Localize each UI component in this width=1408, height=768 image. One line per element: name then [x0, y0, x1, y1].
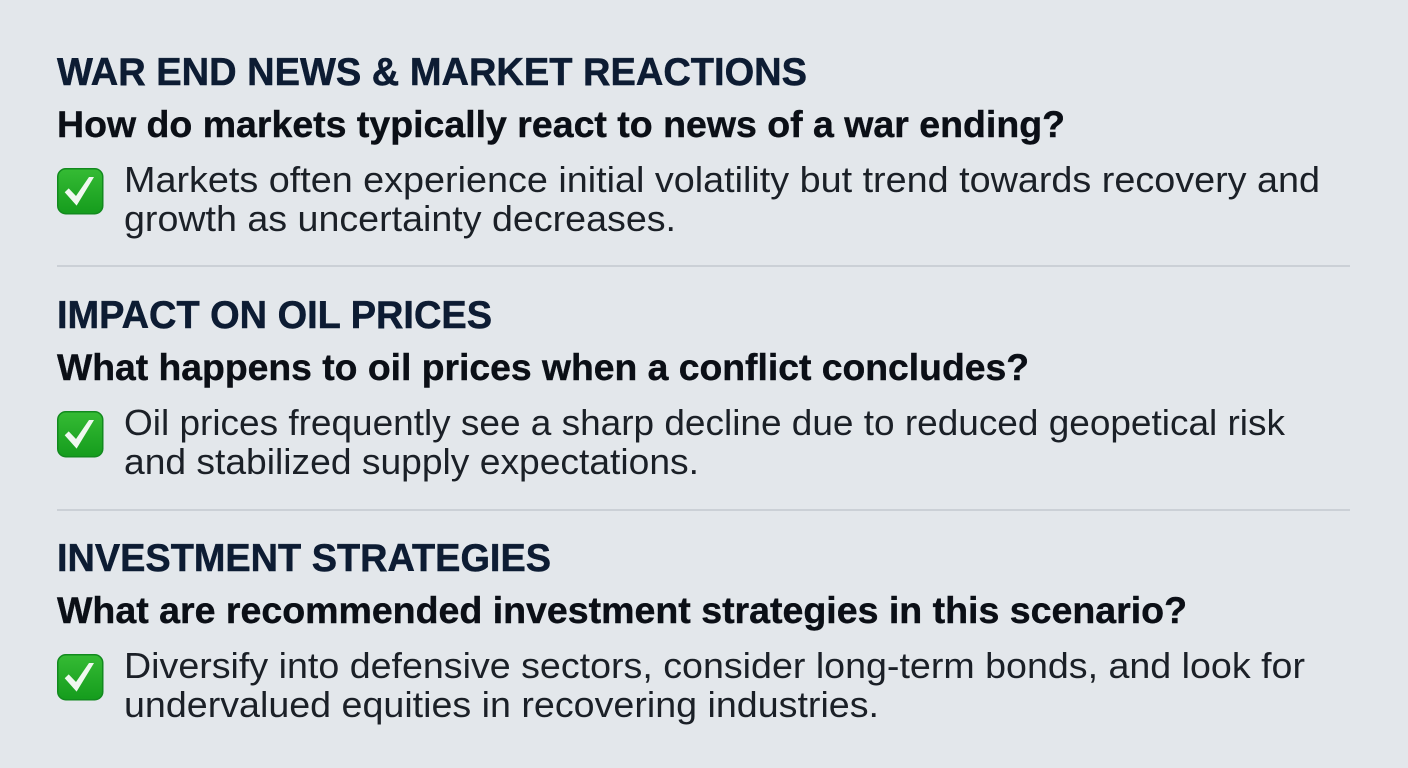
heading: war end news: WAR END NEWS & MARKET REACTIONS	[57, 51, 807, 94]
answer: oil prices	[124, 402, 1286, 482]
answer: investment strategies: Diversify into defensive sectors, consider long-term bonds, and look for	[124, 645, 1305, 686]
panel: war end news and market reactions	[57, 51, 1320, 239]
icon: green check mark	[58, 169, 103, 214]
question: investment strategies: What are recommended investment strategies in this scenario?	[57, 590, 1187, 631]
panel: impact on oil prices	[57, 294, 1286, 482]
answer: market reaction: Markets often experience initial volatility but trend towards recovery and	[124, 159, 1320, 200]
answer: market reaction: growth as uncertainty decreases.	[124, 198, 676, 239]
icon: green check mark	[58, 655, 103, 700]
answer: investment strategies	[124, 645, 1305, 725]
answer: investment strategies: undervalued equities in recovering industries.	[124, 684, 879, 725]
heading: investment strategies: INVESTMENT STRATEGIES	[57, 537, 551, 580]
icon: green check mark	[58, 412, 103, 457]
question: oil prices: What happens to oil prices when a conflict concludes?	[57, 347, 1029, 388]
answer: oil prices: and stabilized supply expectations.	[124, 441, 699, 482]
question: market reaction: How do markets typically react to news of a war ending?	[57, 104, 1065, 145]
panel: investment strategies	[57, 537, 1305, 725]
answer: oil prices: Oil prices frequently see a sharp decline due to reduced geopetical risk	[124, 402, 1286, 443]
heading: impact on oil prices: IMPACT ON OIL PRICES	[57, 294, 492, 337]
answer: market reaction	[124, 159, 1320, 239]
